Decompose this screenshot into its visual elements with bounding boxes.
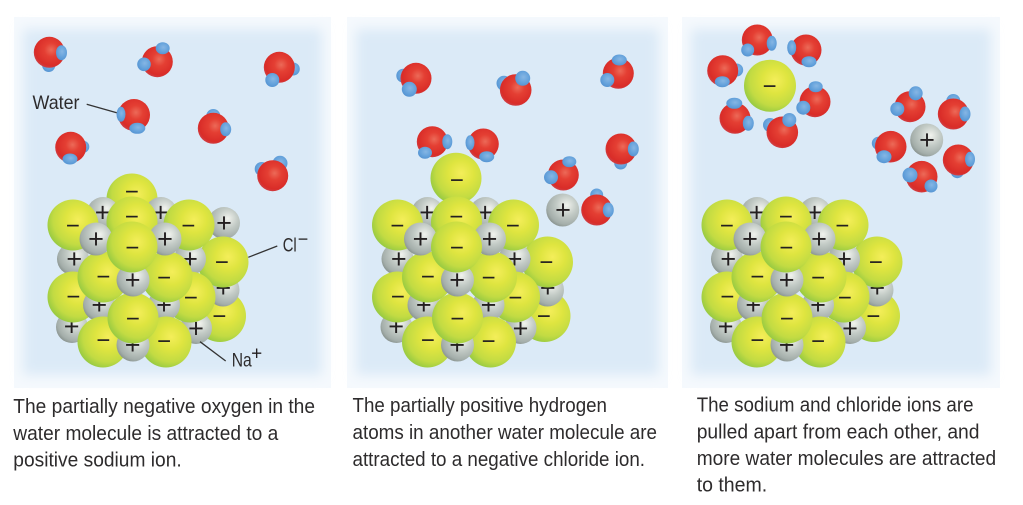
salt crystal 2: − (450, 235, 464, 262)
label: water: Water (32, 92, 80, 114)
salt crystal 3: + (810, 290, 826, 320)
salt crystal 3: + (745, 290, 761, 320)
water molecule 6 (55, 132, 89, 164)
hydrated chloride cluster: − (762, 73, 777, 100)
salt crystal 2: + (413, 224, 428, 254)
caption 3 (697, 395, 996, 497)
water molecule 8 (581, 188, 614, 226)
salt crystal 2: − (481, 265, 496, 292)
salt crystal 1: + (156, 290, 172, 320)
salt crystal 3: − (811, 328, 825, 355)
salt crystal 2: − (421, 264, 435, 291)
caption 3: pulled apart from each other, and (697, 421, 980, 443)
panel background 3 (682, 17, 1000, 388)
salt crystal 1: − (96, 264, 110, 291)
salt crystal 3: + (779, 330, 795, 360)
salt crystal 3: − (838, 285, 852, 312)
salt crystal 2: − (450, 167, 464, 194)
salt crystal 2: + (449, 330, 465, 360)
label: sodium ion: + (251, 344, 262, 364)
label: chloride ion: − (298, 229, 308, 249)
water molecule 5 (198, 109, 231, 144)
salt crystal 3: + (749, 198, 765, 228)
salt crystal 1: − (96, 327, 110, 354)
salt crystal 1: + (188, 313, 204, 343)
salt crystal 2: + (540, 273, 556, 303)
salt crystal 2: + (388, 312, 404, 342)
label: sodium ion: Na (232, 350, 252, 372)
salt crystal 3: − (720, 213, 734, 240)
salt crystal 2: + (477, 198, 493, 228)
salt crystal 1 (48, 174, 248, 368)
salt crystal 1: + (125, 265, 141, 295)
salt crystal 2: + (481, 290, 496, 320)
label: chloride ion: Cl (283, 235, 297, 257)
caption 2: The partially positive hydrogen (352, 395, 607, 417)
salt crystal 2: − (449, 204, 463, 231)
caption 1: The partially negative oxygen in the (13, 396, 315, 418)
salt crystal 1: + (95, 198, 111, 228)
salt crystal 1: + (125, 330, 141, 360)
salt crystal 1: − (125, 204, 139, 231)
salt crystal 3: + (779, 265, 795, 295)
caption 1: positive sodium ion. (13, 450, 182, 472)
salt crystal 3: + (811, 224, 827, 254)
salt crystal 2: − (537, 303, 551, 330)
water molecule 7 (255, 156, 288, 191)
salt crystal 3: + (842, 313, 858, 343)
salt crystal 1: + (182, 244, 198, 274)
salt crystal 2: + (513, 313, 528, 343)
salt crystal 1: + (66, 244, 82, 274)
salt crystal 3: + (718, 312, 734, 342)
salt crystal 2: + (449, 265, 465, 295)
panel background 2 (347, 17, 668, 388)
salt crystal 2: + (482, 224, 497, 254)
water molecule 4 (116, 99, 150, 134)
salt crystal 1: − (126, 305, 140, 332)
water molecule 7 (606, 134, 639, 170)
salt crystal 2: − (508, 285, 522, 312)
salt crystal 3: + (869, 273, 885, 303)
caption 3: to them. (697, 475, 767, 497)
caption 2 (352, 395, 657, 471)
salt crystal 3: − (780, 305, 794, 332)
salt crystal 1: − (184, 285, 198, 312)
free sodium ion (546, 194, 579, 226)
salt crystal 3: − (720, 284, 734, 311)
hydrated chloride cluster (707, 24, 830, 148)
salt crystal 3: − (811, 265, 825, 292)
salt crystal 3: + (742, 224, 758, 254)
water molecule 2 (137, 42, 173, 77)
panel background 1 (14, 17, 331, 388)
salt crystal 2: − (539, 249, 553, 276)
salt crystal 2: − (421, 327, 435, 354)
salt crystal 2 (372, 153, 573, 368)
label: sodium ion (200, 342, 262, 372)
water molecule 4 (417, 126, 452, 159)
water molecule 1 (396, 63, 432, 97)
salt crystal 3: − (750, 327, 764, 354)
salt crystal 1: − (215, 249, 229, 276)
salt crystal 3: + (807, 198, 823, 228)
caption 3: more water molecules are attracted (697, 448, 996, 470)
salt crystal 1: + (64, 312, 80, 342)
caption 1: water molecule is attracted to a (12, 423, 279, 445)
water molecule 5 (466, 128, 499, 162)
salt crystal 3: − (866, 303, 880, 330)
salt crystal 1: − (125, 179, 139, 206)
salt crystal 1: − (125, 235, 139, 262)
salt crystal 2: − (391, 284, 405, 311)
panel: hydrogen attracted to chloride ion (347, 17, 668, 471)
salt crystal 3: − (750, 264, 764, 291)
salt crystal 2: − (450, 305, 464, 332)
salt crystal 2: + (391, 244, 407, 274)
caption 1 (12, 396, 315, 472)
free sodium ion: + (555, 195, 571, 225)
salt crystal 3: − (835, 213, 849, 240)
salt crystal 1: − (212, 303, 226, 330)
salt crystal 1: + (153, 198, 169, 228)
salt crystal 1: − (157, 265, 171, 292)
label: water (32, 92, 117, 114)
panel: water molecule attracted to sodium ion (12, 17, 331, 472)
salt crystal 1: + (215, 273, 231, 303)
salt crystal 2: + (416, 290, 432, 320)
salt crystal 1: + (88, 224, 104, 254)
salt crystal 3 (702, 196, 902, 368)
salt crystal 3: − (779, 235, 793, 262)
salt crystal 3: + (720, 244, 736, 274)
label: chloride ion (248, 229, 308, 257)
salt crystal 2: + (419, 198, 435, 228)
salt crystal 1: − (66, 284, 80, 311)
caption 2: atoms in another water molecule are (352, 422, 657, 444)
hydrated sodium cluster (872, 86, 975, 192)
hydrated sodium cluster: + (919, 125, 935, 155)
caption 3: The sodium and chloride ions are (697, 395, 974, 417)
water molecule 3 (264, 52, 300, 87)
water molecule 1 (34, 37, 67, 72)
salt crystal 1: + (157, 224, 173, 254)
salt crystal 2: − (481, 328, 496, 355)
water molecule 3 (600, 54, 634, 89)
water molecule 2 (496, 71, 532, 106)
salt crystal 1: − (157, 328, 171, 355)
caption 2: attracted to a negative chloride ion. (352, 449, 645, 471)
salt crystal 3: − (869, 249, 883, 276)
salt crystal 2: + (507, 244, 522, 274)
salt crystal 2: − (390, 213, 404, 240)
salt crystal 1: − (66, 213, 80, 240)
salt crystal 2: − (506, 213, 520, 240)
water molecule 6 (544, 156, 579, 190)
salt crystal 1: + (91, 290, 107, 320)
salt crystal 3: − (779, 204, 793, 231)
panel: ions pulled apart (682, 17, 1000, 497)
salt crystal 1: + (216, 208, 232, 238)
salt crystal 1: − (181, 213, 195, 240)
salt crystal 3: + (836, 244, 852, 274)
